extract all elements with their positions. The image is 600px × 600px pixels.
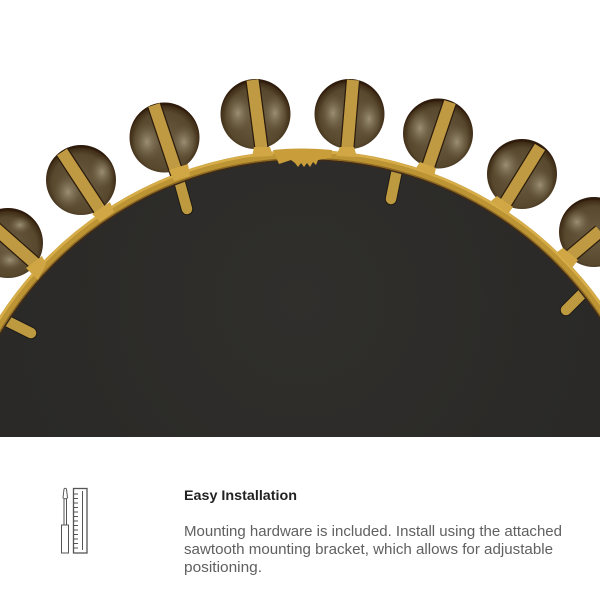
inner tab 2 (179, 180, 187, 209)
sawtooth mounting bracket (273, 148, 332, 167)
decorative dome 7 with strap (487, 139, 557, 214)
icon: screwdriver (62, 488, 68, 553)
inner tab 1 (5, 320, 31, 333)
decorative dome 6 with strap (403, 98, 473, 177)
inner tab 3 (391, 172, 396, 199)
decorative dome 5 with strap (314, 79, 384, 157)
icon: screwdriver and ruler (62, 488, 87, 553)
decorative dome 8 with strap (557, 197, 600, 268)
mirror back panel (0, 159, 600, 437)
description text: sawtooth mounting bracket, which allows for adjustable (184, 542, 553, 558)
description text: positioning. (184, 560, 262, 576)
inner tab 4 (566, 293, 583, 310)
decorative dome 4 with strap (220, 79, 290, 157)
gold frame ring (0, 152, 600, 352)
decorative dome 3 with strap (130, 102, 200, 181)
decorative dome 1 with strap (0, 208, 46, 280)
description text: Mounting hardware is included. Install using the attached (184, 524, 562, 540)
description text (184, 524, 562, 576)
decorative dome 2 with strap (46, 145, 116, 222)
icon: ruler (74, 488, 87, 553)
heading: Easy Installation (184, 487, 297, 503)
